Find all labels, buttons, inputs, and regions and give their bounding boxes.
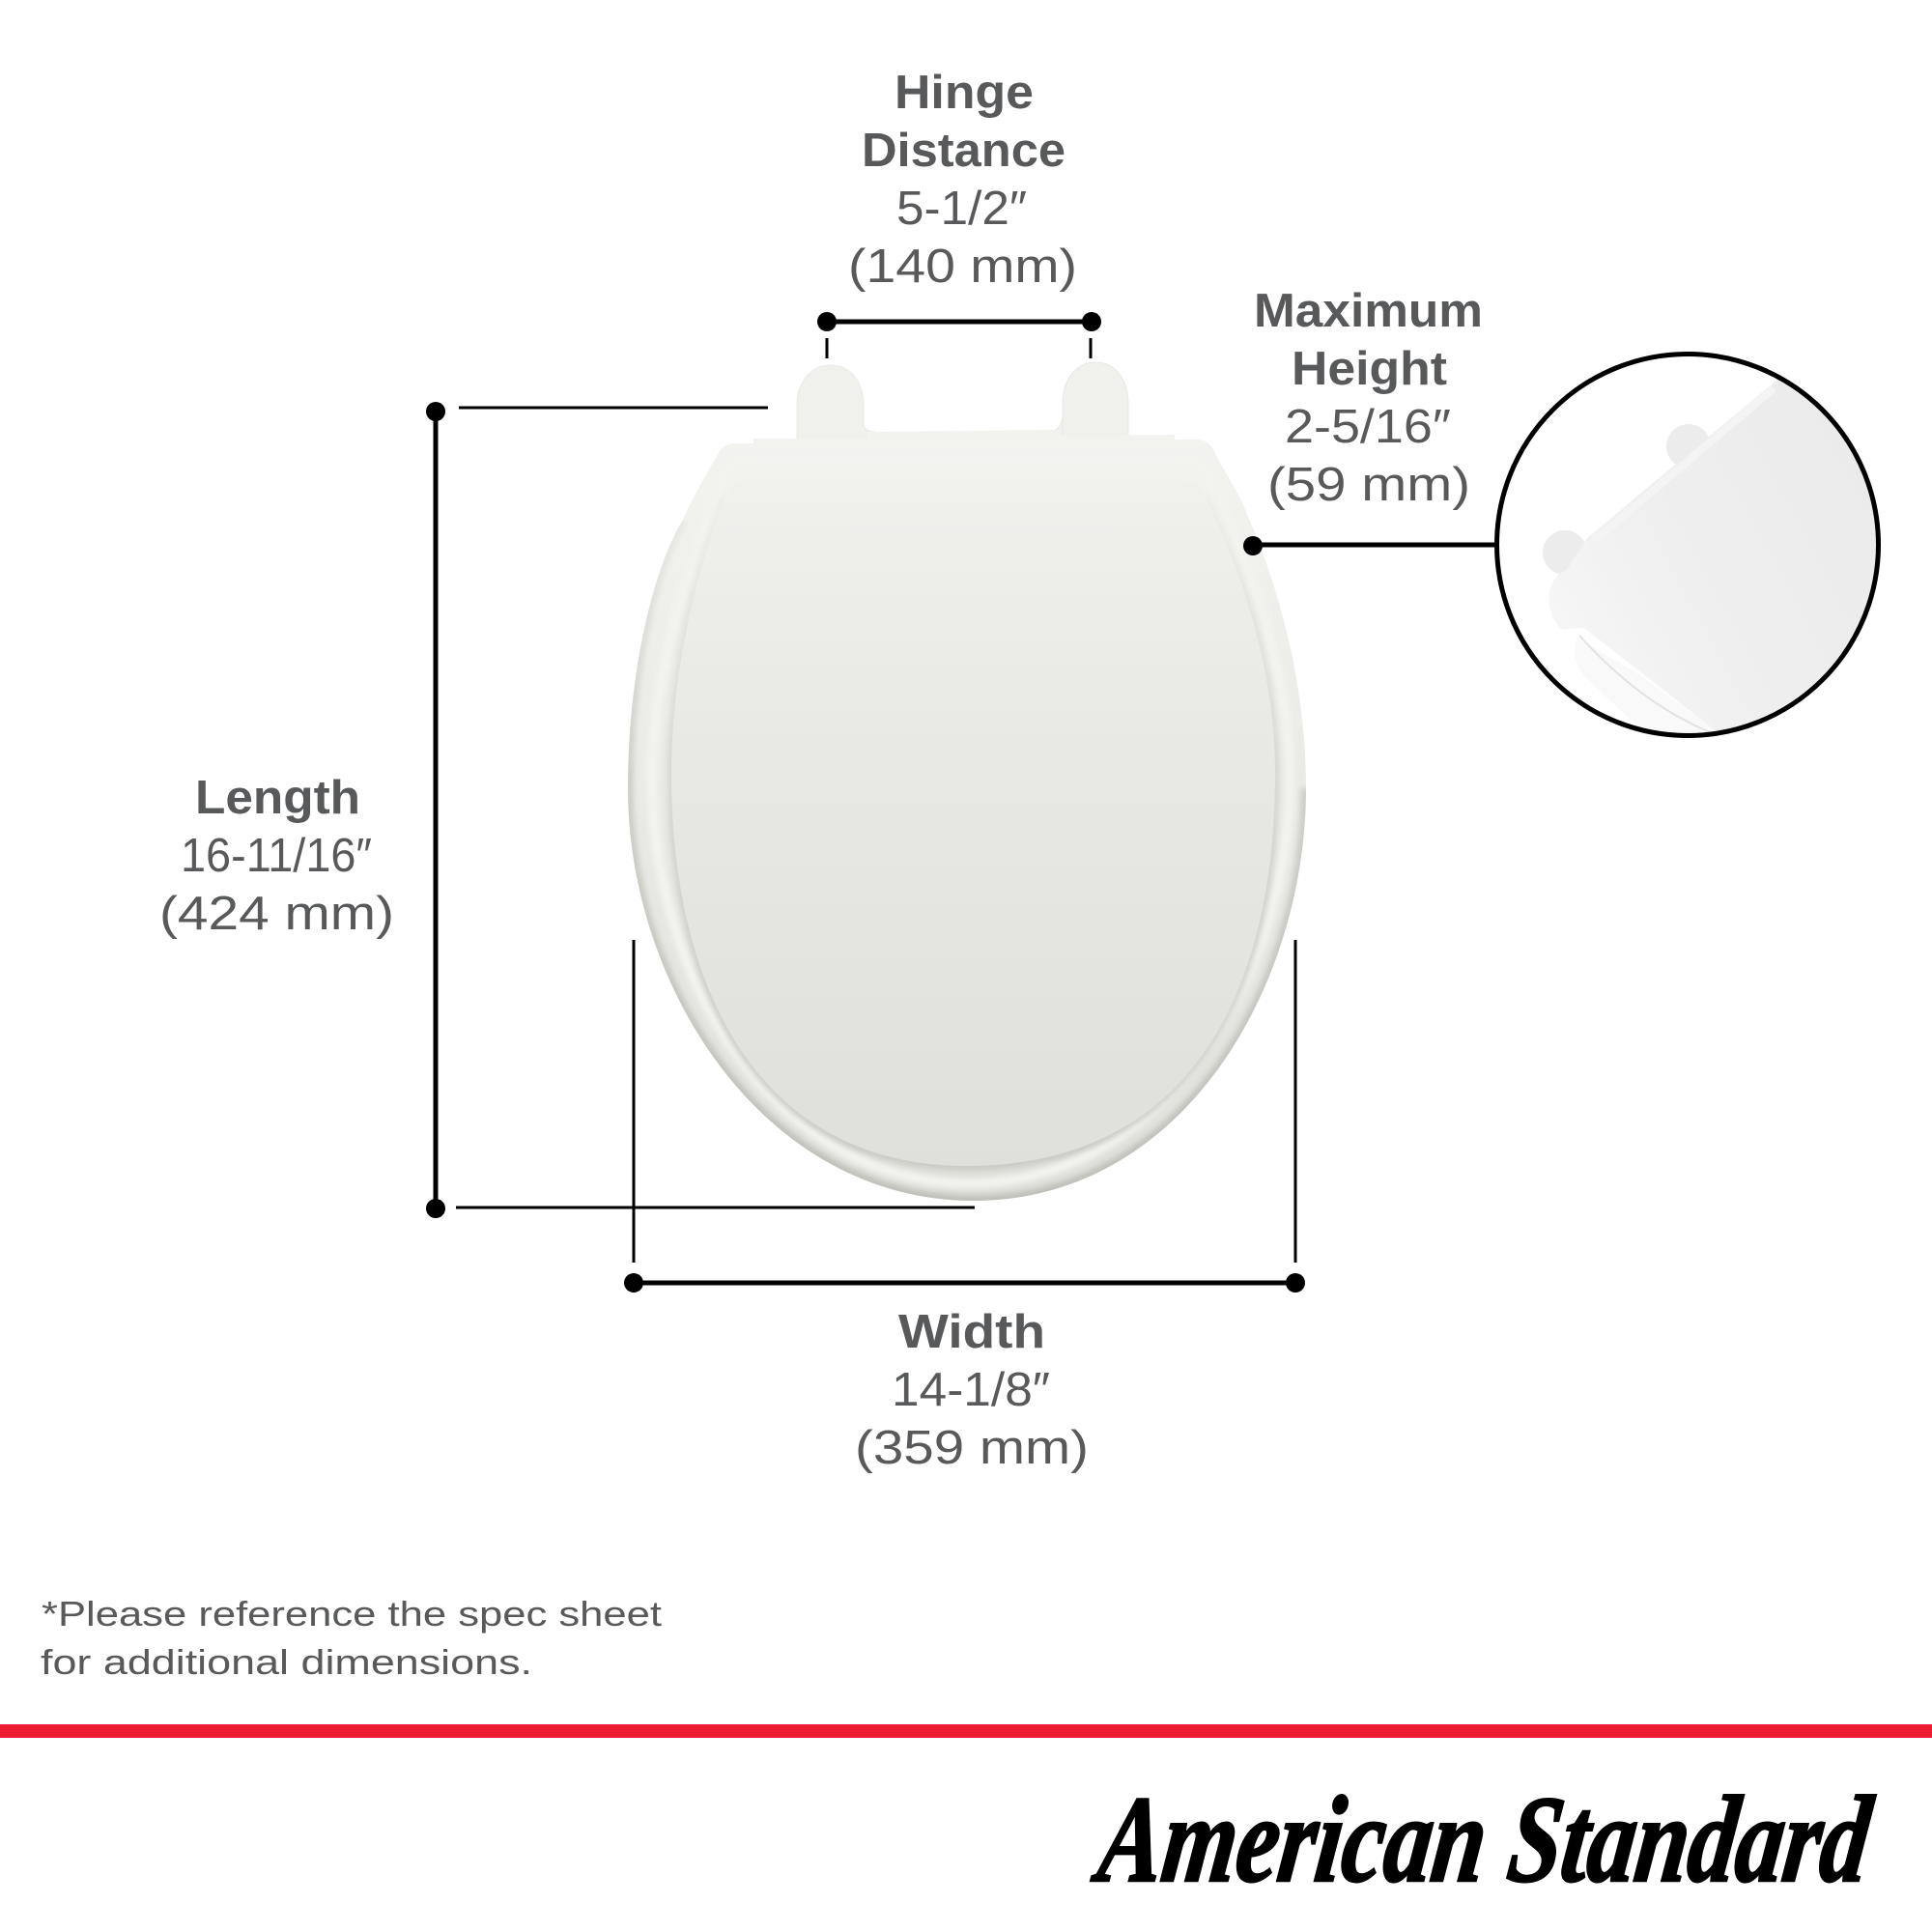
heading: length: Length [195,772,360,824]
heading: maximum height: Maximum [1254,285,1483,337]
detail lower rim [1575,638,1739,749]
left hinge post [797,365,875,449]
heading: width: 14-1/8″ [892,1364,1050,1416]
detail seat body [1549,380,1876,730]
heading: width: Width [898,1306,1045,1358]
detail bumpers [1543,424,1711,575]
footnote: for additional dimensions. [41,1642,532,1682]
heading: maximum height: 2-5/16″ [1285,401,1451,453]
heading: width: (359 mm) [855,1422,1089,1474]
heading: length: (424 mm) [159,888,394,940]
heading: length: 16-11/16″ [181,830,372,882]
heading: hinge distance: Distance [862,125,1065,177]
heading: hinge distance [848,67,1077,293]
length dimension line [426,402,975,1218]
heading: maximum height: (59 mm) [1267,459,1470,511]
detail circle: seat side profile [1494,352,1881,738]
toilet seat product image [628,362,1306,1201]
heading: width [855,1306,1089,1474]
heading: hinge distance: (140 mm) [848,241,1077,293]
rim shading [628,459,1306,1201]
heading: hinge distance: Hinge [895,67,1034,119]
heading: maximum height: Height [1292,343,1447,395]
rim highlight band [649,712,1293,1189]
red divider bar [0,1724,1932,1738]
hinge bridge [753,430,1175,449]
lid edge shading [671,495,1275,1166]
width dimension line [624,940,1305,1293]
footnote [41,1594,662,1682]
heading: maximum height [1254,285,1483,511]
maximum height leader line [1243,536,1495,555]
heading: length [159,772,394,940]
heading: hinge distance: 5-1/2″ [896,183,1027,235]
seat outer rim [628,440,1306,1201]
hinge distance dimension line [817,312,1101,358]
seat lid panel [671,480,1275,1166]
right hinge post [1053,362,1128,449]
footnote: *Please reference the spec sheet [42,1594,662,1634]
